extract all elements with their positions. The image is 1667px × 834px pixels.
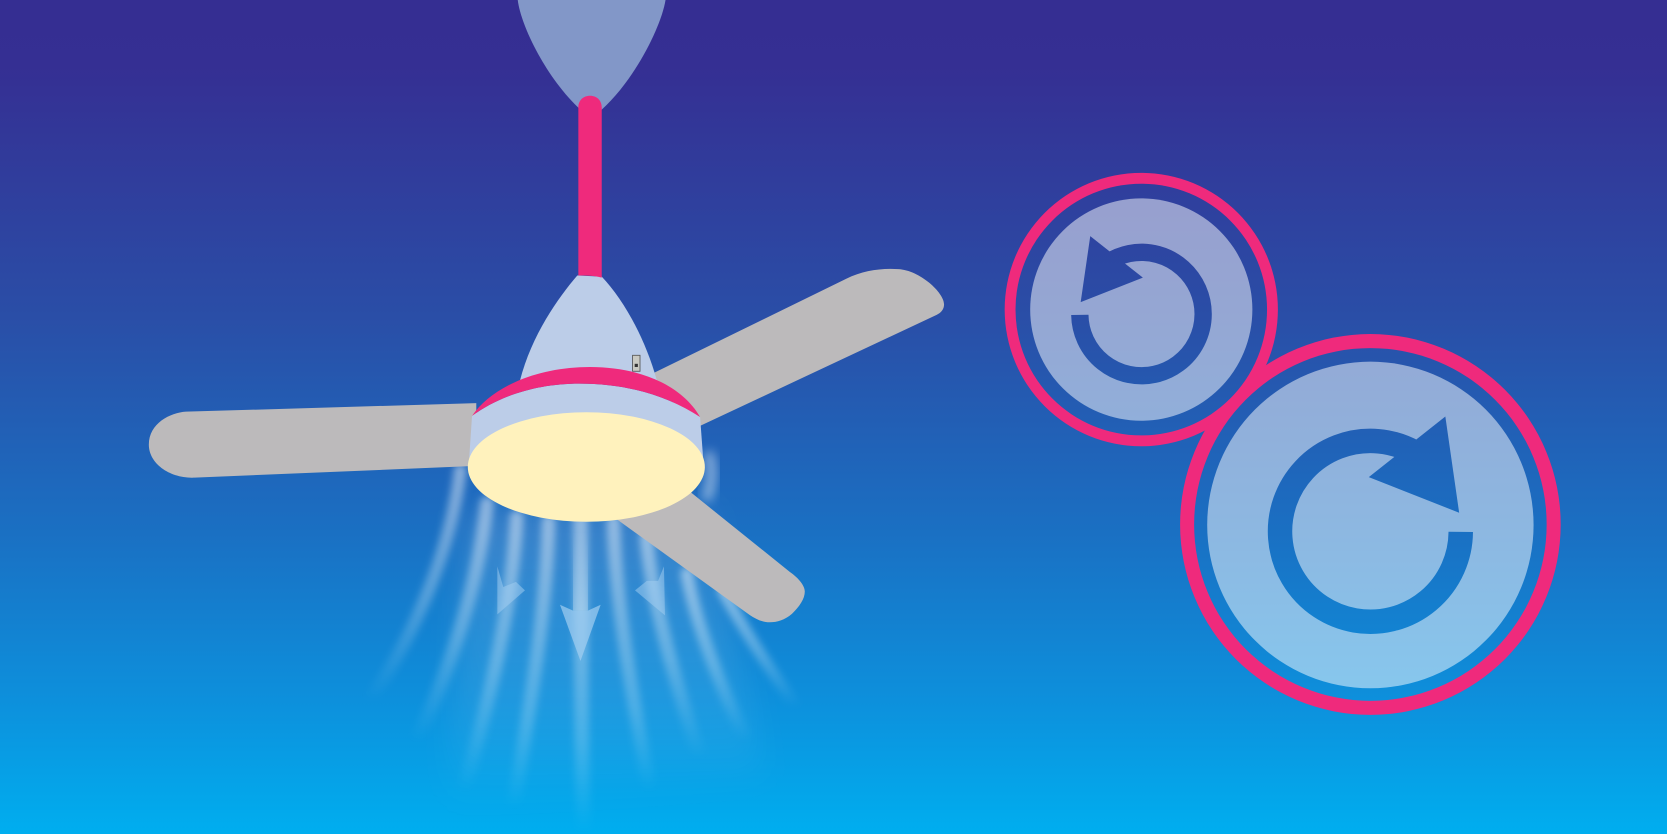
arrow: centre — [560, 605, 601, 661]
fan blade: lower — [617, 493, 805, 622]
fan blade: left — [149, 403, 476, 478]
lamp drum — [469, 384, 704, 467]
band inside ring — [1016, 184, 1267, 435]
air haze under fan — [447, 511, 765, 808]
lamp side glow — [706, 452, 711, 500]
lamp light panel — [468, 412, 705, 522]
rotation icon: clockwise (large) — [1194, 348, 1547, 701]
motor housing — [520, 276, 657, 381]
inner disc — [1030, 198, 1252, 421]
fan blade: right — [649, 269, 944, 428]
clockwise arrow — [1280, 416, 1461, 622]
air flow streaks — [370, 470, 795, 831]
rotation icons: merged pink outlines — [1005, 173, 1561, 715]
rotation icon: counter-clockwise (small) — [1016, 184, 1267, 435]
arrow: right — [635, 566, 665, 615]
inner disc — [1207, 362, 1534, 688]
band inside ring — [1194, 348, 1547, 701]
arrow stem: centre — [573, 532, 588, 611]
counter-clockwise arrow — [1080, 236, 1203, 376]
arrow: left — [497, 566, 525, 614]
pink trim band — [472, 367, 700, 417]
pull switch — [633, 355, 640, 371]
airflow arrows — [497, 532, 665, 661]
downrod — [578, 96, 602, 278]
ceiling canopy — [518, 0, 666, 110]
